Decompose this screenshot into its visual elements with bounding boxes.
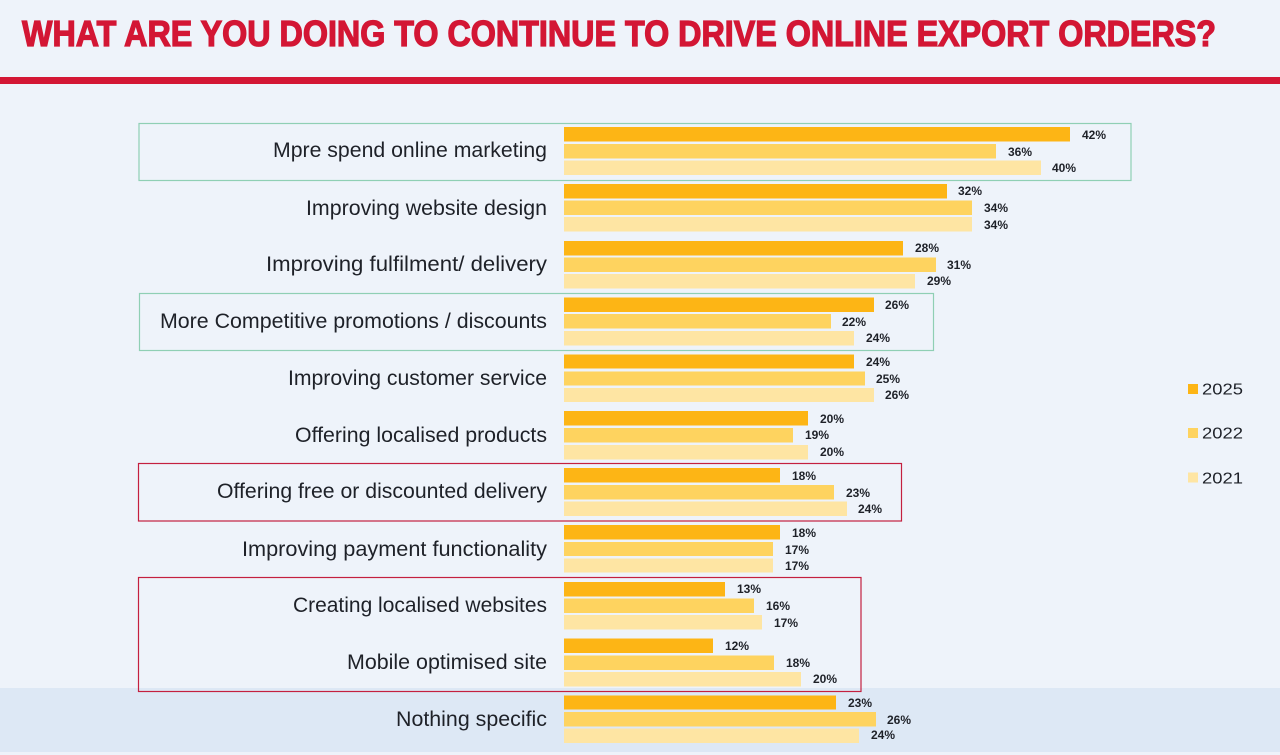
row: Mobile optimised site: 18% bbox=[786, 656, 810, 670]
row: Mpre spend online marketing: 42% bbox=[1082, 128, 1106, 142]
highlight box: green, online marketing bbox=[139, 124, 1131, 180]
legend bbox=[1188, 382, 1243, 488]
row: Offering free or discounted delivery: 18% bbox=[792, 469, 816, 483]
row: Improving fulfilment/ delivery: Improving fulfilment/ delivery bbox=[266, 252, 547, 276]
row: Creating localised websites: 16% bbox=[766, 599, 790, 613]
row: Offering localised products: Offering localised products bbox=[295, 423, 547, 447]
title rule bbox=[0, 77, 1280, 84]
row: Mpre spend online marketing: 36% bbox=[1008, 145, 1032, 159]
row: Improving customer service: 26% bbox=[885, 388, 909, 402]
row: Improving website design: 34% bbox=[984, 201, 1008, 215]
row: Nothing specific bbox=[396, 696, 911, 743]
row: Offering localised products: 20% bbox=[820, 445, 844, 459]
row: Improving payment functionality: 17% bbox=[785, 543, 809, 557]
row: Improving fulfilment/ delivery bbox=[266, 241, 971, 288]
row: Mobile optimised site bbox=[347, 638, 837, 686]
row: Offering free or discounted delivery: 24% bbox=[858, 502, 882, 516]
legend: 2022 bbox=[1202, 426, 1243, 442]
row: Improving website design: 34% bbox=[984, 218, 1008, 232]
row: More Competitive promotions / discounts: 24% bbox=[866, 331, 890, 345]
band: nothing specific background bbox=[0, 688, 1280, 752]
row: Creating localised websites bbox=[293, 582, 798, 630]
row: Mobile optimised site: 12% bbox=[725, 639, 749, 653]
row: Mpre spend online marketing: 40% bbox=[1052, 161, 1076, 175]
row: Improving fulfilment/ delivery: 31% bbox=[947, 258, 971, 272]
row: Offering free or discounted delivery: Offering free or discounted delivery bbox=[217, 479, 547, 503]
row: Mobile optimised site: 20% bbox=[813, 672, 837, 686]
row: Nothing specific: 23% bbox=[848, 696, 872, 710]
row: Improving customer service bbox=[288, 354, 909, 402]
row: Offering free or discounted delivery: 23% bbox=[846, 486, 870, 500]
row: Nothing specific: 24% bbox=[871, 728, 895, 742]
row: Improving fulfilment/ delivery: 28% bbox=[915, 241, 939, 255]
row: Mpre spend online marketing: Mpre spend online marketing bbox=[273, 138, 547, 162]
legend: 2025 bbox=[1202, 382, 1243, 398]
row: More Competitive promotions / discounts: 26% bbox=[885, 298, 909, 312]
row: More Competitive promotions / discounts: 22% bbox=[842, 315, 866, 329]
row: Mobile optimised site: Mobile optimised site bbox=[347, 650, 547, 674]
row: Creating localised websites: 17% bbox=[774, 616, 798, 630]
row: Improving customer service: Improving customer service bbox=[288, 366, 547, 390]
row: Offering localised products bbox=[295, 411, 844, 460]
row: Creating localised websites: Creating localised websites bbox=[293, 593, 547, 617]
row: Improving website design: 32% bbox=[958, 184, 982, 198]
row: Offering localised products: 19% bbox=[805, 428, 829, 442]
highlight box: green, promotions bbox=[140, 294, 934, 350]
row: Improving payment functionality bbox=[242, 525, 816, 573]
row: Improving customer service: 24% bbox=[866, 355, 890, 369]
row: Nothing specific: 26% bbox=[887, 713, 911, 727]
legend: 2021 bbox=[1202, 470, 1243, 488]
row: Improving payment functionality: 18% bbox=[792, 526, 816, 540]
row: Mpre spend online marketing bbox=[273, 127, 1106, 175]
row: Improving fulfilment/ delivery: 29% bbox=[927, 274, 951, 288]
row: More Competitive promotions / discounts bbox=[160, 298, 909, 346]
row: Improving payment functionality: Improving payment functionality bbox=[242, 537, 547, 561]
row: Offering localised products: 20% bbox=[820, 412, 844, 426]
row: Improving customer service: 25% bbox=[876, 372, 900, 386]
row: Nothing specific: Nothing specific bbox=[396, 707, 547, 731]
row: Improving website design: Improving website design bbox=[306, 196, 547, 220]
row: Improving payment functionality: 17% bbox=[785, 559, 809, 573]
row: Creating localised websites: 13% bbox=[737, 582, 761, 596]
row: More Competitive promotions / discounts: More Competitive promotions / discounts bbox=[160, 309, 547, 333]
row: Improving website design bbox=[306, 184, 1008, 232]
highlight box: red, free delivery bbox=[138, 464, 902, 521]
row: Offering free or discounted delivery bbox=[217, 468, 882, 516]
highlight box: red, localised websites and mobile bbox=[138, 578, 861, 692]
